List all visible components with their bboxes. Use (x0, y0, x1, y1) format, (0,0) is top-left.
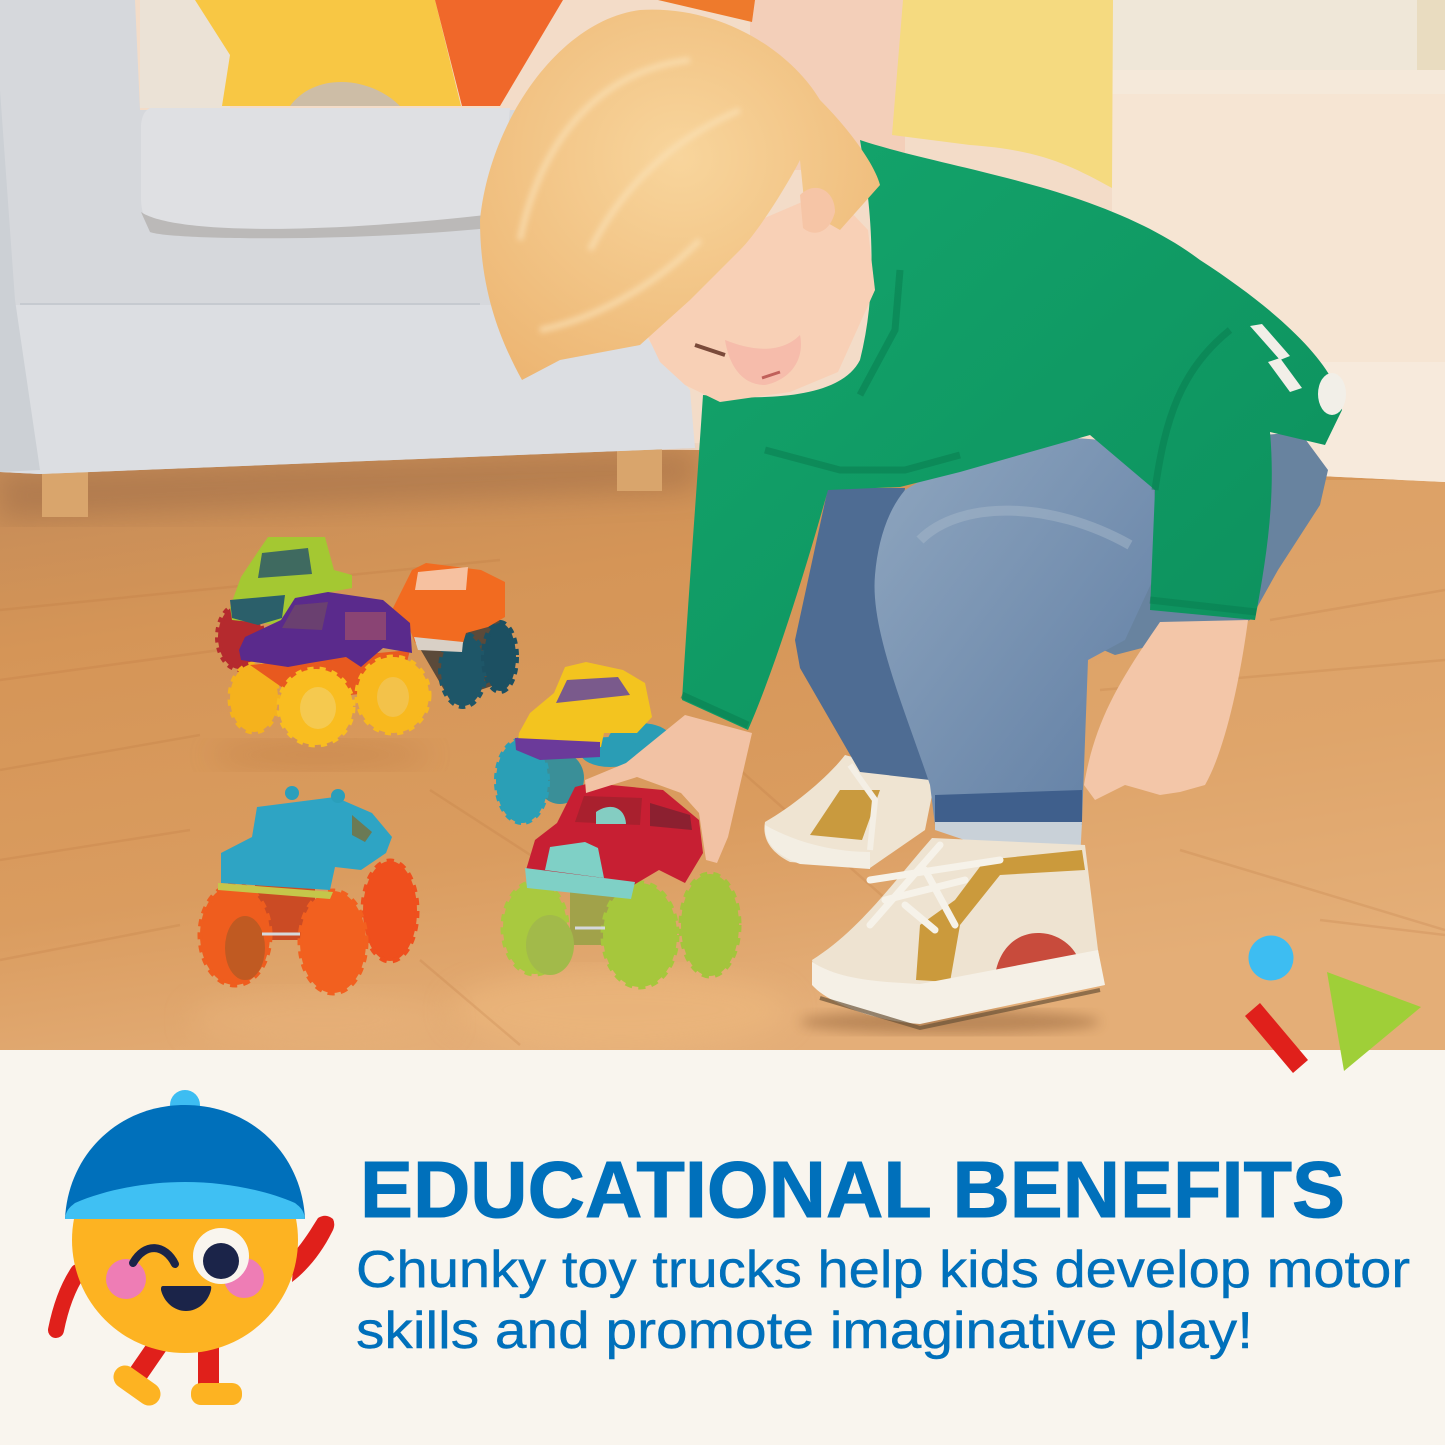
sofa (0, 0, 700, 520)
sweater folds (682, 270, 1256, 725)
hat pompom (170, 1090, 200, 1120)
floor (0, 450, 1445, 1052)
mascot (56, 1090, 334, 1405)
right hand (1084, 620, 1248, 800)
blue truck (200, 786, 417, 993)
sofa cushion (141, 108, 510, 236)
open eye (193, 1228, 249, 1284)
right leg (198, 1345, 219, 1390)
ear (800, 188, 835, 233)
front shoe (812, 838, 1105, 1028)
green triangle (1327, 972, 1421, 1071)
blue circle (1248, 936, 1294, 980)
face (72, 1219, 298, 1353)
winking eye (133, 1248, 175, 1264)
toy trucks (200, 537, 739, 993)
sofa floor shadow (0, 450, 700, 520)
red bar (1245, 1003, 1308, 1073)
pink wall section (750, 0, 905, 170)
near jeans leg (875, 438, 1162, 825)
child (480, 10, 1346, 1034)
right wall panel (1112, 0, 1445, 482)
right cheek (224, 1258, 264, 1298)
mouth (161, 1286, 211, 1311)
bottom panel (0, 1050, 1445, 1445)
sweater (682, 140, 1342, 730)
shoe shadow (800, 1010, 1100, 1034)
curtain (892, 0, 1113, 188)
right arm (292, 1216, 334, 1282)
back thigh jeans (1080, 432, 1328, 655)
orange truck (392, 563, 516, 706)
red truck (503, 783, 739, 987)
sweater buttons (1250, 324, 1346, 415)
face (640, 190, 875, 402)
jeans cuff (935, 822, 1082, 862)
left cheek (106, 1259, 146, 1299)
left leg (138, 1345, 158, 1374)
photo scene (0, 0, 1445, 1052)
body text (356, 1241, 1410, 1360)
yellow truck (496, 662, 672, 823)
body text: Chunky toy trucks help kids develop motor (356, 1241, 1410, 1299)
body text: skills and promote imaginative play! (356, 1302, 1253, 1360)
sofa leg front (42, 470, 88, 517)
left arm (56, 1272, 78, 1330)
left foot (125, 1377, 149, 1394)
back shoe (764, 755, 935, 869)
hat (65, 1105, 305, 1219)
far jeans leg (795, 488, 930, 780)
hand on truck (585, 715, 752, 863)
lime truck (218, 537, 352, 669)
back wall (0, 0, 1445, 480)
hat brim (65, 1182, 305, 1219)
heading: EDUCATIONAL BENEFITS (360, 1145, 1345, 1234)
hair (480, 10, 880, 380)
sofa leg back (617, 445, 662, 491)
right foot (191, 1383, 242, 1405)
purple truck (230, 592, 429, 745)
pillows (140, 0, 755, 108)
